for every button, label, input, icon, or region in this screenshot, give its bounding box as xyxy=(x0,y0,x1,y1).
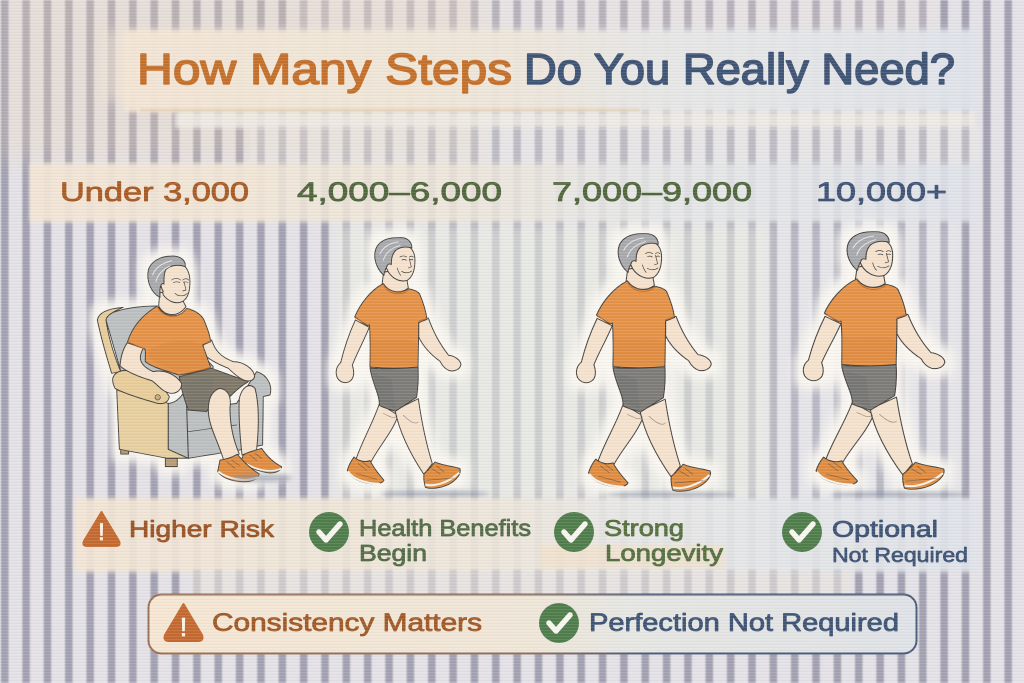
outcome: health benefits begin: Health Benefits xyxy=(359,515,531,541)
summary: consistency matters: Consistency Matters xyxy=(212,609,482,637)
outcome: higher risk xyxy=(83,512,275,546)
panel: summary pill: ! xyxy=(180,612,187,642)
icon: check circle xyxy=(554,512,594,552)
outcome: optional, not required: Optional xyxy=(832,516,938,542)
figure: man seated in armchair xyxy=(97,256,282,482)
icon: check circle xyxy=(539,603,579,643)
panel: outcome labels band xyxy=(75,498,976,572)
outcome: optional, not required xyxy=(782,512,968,567)
icon: check circle xyxy=(309,512,349,552)
icon: warning triangle xyxy=(164,604,202,641)
outcome: health benefits begin: Begin xyxy=(359,540,427,566)
outcome: strong longevity: Strong xyxy=(604,515,684,541)
panel: title band xyxy=(100,30,976,128)
figure: walking man, 7,000–9,000 xyxy=(576,234,711,491)
figure: walking man, 10,000+ xyxy=(803,232,945,489)
summary: perfection not required: Perfection Not Required xyxy=(589,609,899,637)
title: How Many Steps xyxy=(137,45,512,94)
outcome: higher risk: ! xyxy=(98,519,105,546)
outcome: optional, not required: Not Required xyxy=(832,545,968,567)
shadows: ground shadows beside and below feet xyxy=(232,474,970,498)
panel: faded stripes between bands xyxy=(190,572,850,594)
outcome: health benefits begin xyxy=(309,512,531,566)
outcome: strong longevity xyxy=(554,512,724,566)
title xyxy=(137,45,955,94)
icon: check circle xyxy=(782,512,822,552)
step range: 10,000+: 10,000+ xyxy=(816,177,947,207)
icon: warning triangle xyxy=(83,512,120,546)
outcome: higher risk: Higher Risk xyxy=(129,516,275,542)
step range: 7,000–9,000: 7,000–9,000 xyxy=(552,177,752,207)
step range: under 3,000: Under 3,000 xyxy=(60,177,249,207)
outcome: strong longevity: Longevity xyxy=(605,540,724,566)
title: Do You Really Need? xyxy=(524,45,955,94)
step range: 4,000–6,000: 4,000–6,000 xyxy=(297,177,502,207)
panel: step range band xyxy=(30,163,976,222)
panel: summary pill xyxy=(148,594,916,654)
figure: walking man, 4,000–6,000 xyxy=(336,238,461,488)
panel: faded backdrop behind figures xyxy=(250,128,980,500)
